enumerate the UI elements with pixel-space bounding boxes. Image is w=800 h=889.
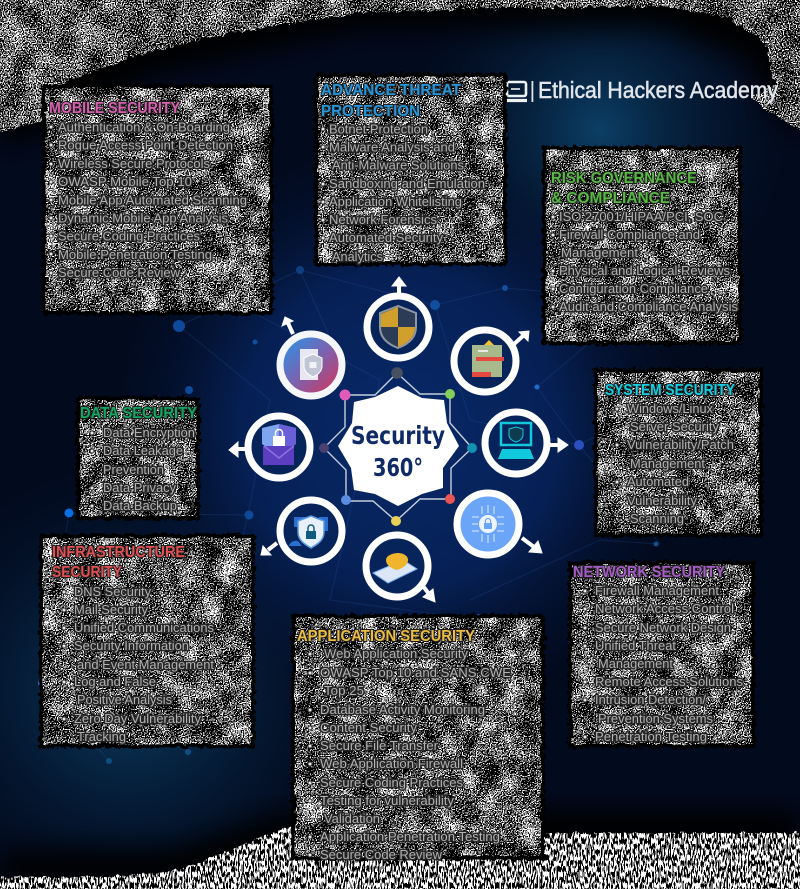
hub label: Security 360	[351, 421, 445, 482]
hub: white star	[338, 386, 459, 506]
list: application security items: Web Application Firewall	[320, 756, 463, 771]
logo: Ethical Hackers Academy: Ethical Hackers Academy	[538, 77, 778, 103]
list: network security items: Firewall Management	[595, 583, 719, 598]
heading: data security: DATA SECURITY	[80, 405, 198, 422]
icon: laptop logo	[505, 82, 527, 100]
panel: advance threat protection: PROTECTION	[321, 103, 420, 120]
panel: system security	[594, 368, 763, 537]
heading: risk governance: RISK GOVERNANCE	[551, 170, 697, 187]
list: application security items: Web Application Security	[324, 646, 468, 661]
connector octagon	[324, 373, 472, 521]
list: network security items: Remote Access Solutions	[595, 674, 744, 689]
list: network security items: Penetration Testing	[595, 729, 707, 744]
list: risk governance items: Physical and Logical Reviews	[559, 263, 730, 278]
list: mobile security items: Dynamic Mobile App Analysis	[58, 210, 228, 226]
icon: chip lock circle	[457, 493, 519, 555]
panel: infrastructure security	[39, 534, 255, 748]
list: infrastructure items: DNS Security	[74, 584, 151, 599]
list: advance threat items: Network Forensics	[329, 212, 437, 227]
arrow: from data lock	[229, 442, 246, 457]
list: system security items: Scanning	[630, 511, 684, 526]
list: system security items: Vulnerability/Patch	[627, 437, 734, 452]
list: advance threat items: Analytics	[332, 249, 383, 264]
arrow: from shield lock	[261, 543, 277, 555]
icon: shield lock circle	[280, 500, 342, 562]
list: application security items: Secure Code Review	[320, 847, 443, 862]
icon: mobile shield circle	[280, 334, 342, 396]
icon: threat shield circle	[367, 296, 429, 358]
list: network security items: Unified Threat	[595, 638, 676, 653]
list: system security items: Automated	[627, 474, 689, 489]
icon: data lock circle	[248, 416, 310, 478]
panel: advance threat protection	[314, 73, 507, 266]
list: application security items: Database Activity Monitoring	[320, 702, 485, 717]
list: risk governance items: Management	[561, 245, 638, 260]
list: advance threat items: Application Whitelisting	[329, 194, 462, 209]
list: advance threat items: Malware Analysis and	[329, 140, 455, 154]
list: application security items: Validation	[324, 811, 380, 826]
list: network security items: Management	[598, 656, 673, 671]
arrow: from clipboard	[513, 331, 529, 345]
list: data security items: Data Backup	[103, 498, 177, 513]
list: network security items	[583, 583, 744, 744]
panel: risk governance and compliance: & COMPLIANCE	[551, 190, 670, 207]
list: data security items: Prevention	[103, 462, 164, 477]
list: mobile security items: Mobile Penetration Testing	[58, 247, 212, 262]
list: mobile security items: Secure Code Review	[58, 265, 181, 280]
list: advance threat items	[321, 122, 485, 264]
list: risk governance items: Firewall Compliance and	[559, 227, 700, 242]
panel: application security	[291, 614, 545, 862]
list: application security items: Application Penetration Testing	[320, 829, 500, 844]
heading: mobile security: MOBILE SECURITY	[49, 100, 181, 117]
list: advance threat items: Anti-Malware Solutions	[332, 158, 464, 172]
list: infrastructure items: Positive Analysis	[77, 692, 172, 707]
list: application security items: Secure File Transfer	[320, 738, 439, 753]
list: data security items	[90, 425, 195, 513]
heading: advance threat protection: ADVANCE THREAT	[321, 82, 462, 99]
icon: phone shield circle	[366, 535, 428, 597]
list: infrastructure items: Unified Communications	[74, 620, 214, 635]
panel: data security	[76, 396, 200, 520]
hub label: Security 360: 360°	[373, 453, 423, 482]
panel: risk governance and compliance	[542, 146, 742, 345]
panel: network security	[568, 561, 755, 748]
heading: infrastructure security: INFRASTRUCTURE	[52, 544, 185, 561]
arrow: from laptop	[548, 438, 568, 452]
list: system security items: Management	[630, 456, 705, 471]
list: system security items	[615, 401, 734, 526]
list: mobile security items: Rogue Access Point Detection	[58, 138, 233, 153]
list: infrastructure items: Zero Day Vulnerability	[74, 711, 201, 726]
arrow: from phone	[420, 582, 435, 602]
panel: mobile security	[42, 84, 273, 315]
icon: laptop circle	[485, 412, 547, 474]
list: advance threat items: Botnet Protection	[329, 122, 428, 136]
list: mobile security items: Secure Coding Practices	[58, 229, 200, 244]
arrow: up from threat shield	[392, 277, 406, 295]
list: infrastructure items	[62, 584, 214, 744]
list: infrastructure items: and Event Management	[77, 657, 214, 672]
noise band: bottom edge	[0, 827, 800, 889]
icon: clipboard circle	[454, 330, 516, 392]
list: network security items: Prevention Systems	[598, 711, 713, 726]
list: data security items: Data Privacy	[103, 480, 176, 495]
heading: system security: SYSTEM SECURITY	[605, 382, 736, 399]
diagram: security 360 hub	[229, 277, 568, 602]
list: system security items: Vulnerability	[627, 493, 697, 508]
connector nodes	[319, 367, 477, 526]
list: system security items: Windows/Linux	[627, 401, 713, 416]
list: application security items: OWASP Top 10 and SANS CWE	[320, 665, 511, 680]
list: data security items: Data Leakage	[103, 443, 183, 458]
list: network security items: Intrusion Detection/	[595, 692, 706, 707]
arrow: from mobile	[282, 317, 293, 334]
list: application security items: Content Security	[320, 720, 417, 735]
list: risk governance items: Configuration Compliance	[559, 281, 708, 296]
arrow: from chip	[522, 538, 542, 553]
list: application security items: Secure Coding Practices	[320, 775, 463, 790]
list: system security items: Server Security	[630, 419, 719, 434]
list: risk governance items	[551, 209, 738, 314]
list: infrastructure items: Security Information	[74, 638, 189, 653]
list: mobile security items	[49, 120, 247, 280]
list: network security items: Network Access Control	[595, 601, 734, 616]
list: application security items: Testing for vulnerability	[320, 793, 455, 808]
heading: network security: NETWORK SECURITY	[573, 564, 726, 581]
list: mobile security items: Mobile App Automated Scanning	[58, 192, 247, 207]
list: application security items	[308, 646, 511, 862]
list: mobile security items: OWASP Mobile Top 10	[58, 174, 192, 189]
list: advance threat items: Sandboxing and Emulation	[329, 176, 485, 191]
heading: application security: APPLICATION SECURITY	[297, 628, 476, 645]
list: infrastructure items: Mail Security	[74, 602, 148, 617]
list: data security items: Data Encryption	[103, 425, 195, 440]
list: application security items: Top 25	[324, 683, 364, 698]
hub label: Security 360: Security	[351, 421, 445, 450]
list: infrastructure items: Tracking	[77, 729, 126, 744]
list: infrastructure items: Log and False	[74, 674, 156, 689]
list: advance threat items: Automated Security	[329, 230, 443, 245]
list: network security items: Secure Network Design	[595, 620, 731, 635]
list: risk governance items: Audit and Compliance Analysis	[559, 299, 738, 314]
list: risk governance items: ISO 27001/HIPAA/PCI, SOC	[559, 209, 723, 224]
panel: infrastructure security: SECURITY	[52, 564, 123, 581]
list: mobile security items: Wireless Secure Protocols	[58, 156, 210, 171]
noise band: top edge	[0, 0, 800, 137]
list: mobile security items: Authentication & On-Boarding	[58, 120, 230, 134]
